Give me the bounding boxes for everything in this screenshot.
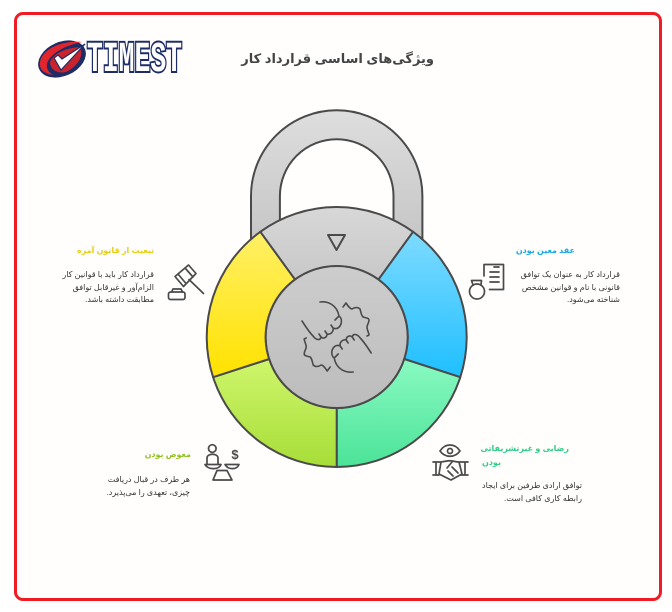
text: contract body: [521, 270, 620, 304]
logo: TIMEST: [87, 35, 182, 84]
icon: fist bump: [302, 302, 371, 372]
icon: ring and document: [470, 264, 504, 299]
text: exchange body: [107, 475, 190, 498]
text: contract heading: عقد معین بودن: [516, 246, 575, 255]
text: exchange body: هر طرف در قبال دریافت: [108, 475, 190, 484]
icon: triangle: [328, 235, 345, 250]
text: law body: قرارداد کار باید با قوانین کار: [62, 270, 154, 279]
shackle: [251, 110, 422, 240]
icon: balance scale: [205, 445, 239, 480]
logo: [38, 35, 182, 84]
segment: mint: [337, 359, 460, 467]
text: consent body: رابطه کاری کافی است.: [504, 494, 582, 502]
text: consent body: توافق ارادی طرفین برای ایجاد: [482, 481, 582, 490]
text: law heading: تبعیت از قانون آمره: [77, 246, 154, 255]
logo: TIMEST: [87, 35, 182, 84]
segment: yellow: [207, 232, 295, 377]
title: ویژگی‌های اساسی قرارداد کار: [241, 51, 434, 66]
text: consent heading: بودن: [482, 458, 501, 467]
icon: gavel: [168, 265, 204, 300]
text: law body: مطابقت داشته باشد.: [85, 295, 154, 304]
text: consent body: [482, 481, 582, 504]
icon: balance scale: $: [231, 447, 239, 462]
text: law body: الزام‌آور و غیرقابل توافق: [73, 282, 154, 292]
text: law body: [62, 270, 154, 304]
segment: blue: [378, 232, 467, 377]
text: contract body: قانونی با نام و قوانین مشخص: [522, 282, 620, 292]
text: consent heading: [480, 444, 569, 467]
text: contract body: شناخته می‌شود.: [567, 295, 620, 304]
segment: top: [260, 207, 413, 280]
text: exchange body: چیزی، تعهدی را می‌پذیرد.: [107, 488, 190, 496]
segment: lime: [213, 359, 337, 467]
icon: eye and handshake: [433, 445, 468, 480]
text: consent heading: رضایی و غیرتشریفاتی: [480, 444, 569, 453]
center disc: [266, 266, 408, 408]
text: contract body: قرارداد کار به عنوان یک توافق: [521, 270, 620, 279]
text: exchange heading: معوض بودن: [145, 450, 191, 459]
